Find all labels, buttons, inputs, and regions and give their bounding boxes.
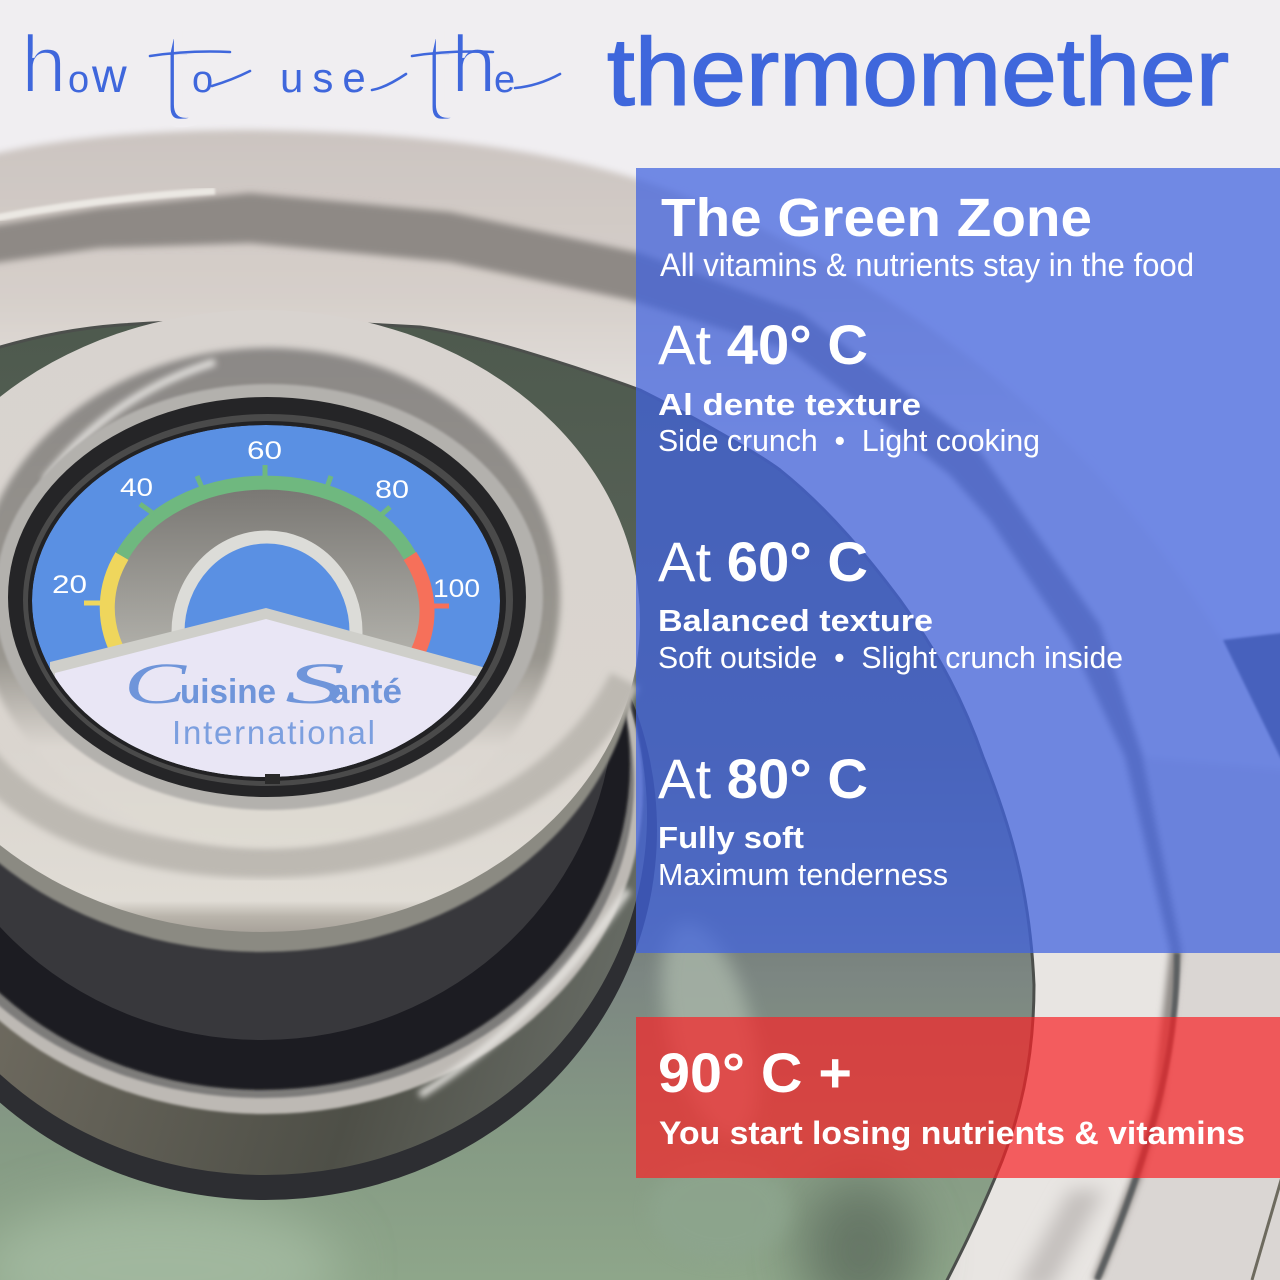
danger background — [636, 1017, 1280, 1178]
dial number 100: 100 — [433, 575, 480, 603]
base highlight — [420, 890, 628, 1095]
rim lower right reflection — [1015, 1190, 1105, 1280]
lid right flange — [1102, 757, 1280, 1280]
heading: at 80 C: At 80° C — [658, 747, 868, 810]
knob body — [0, 310, 640, 932]
text: green zone subtitle: All vitamins & nutrients stay in the food — [660, 247, 1194, 283]
rim highlight — [0, 191, 215, 218]
thermometer dial — [32, 425, 500, 790]
text: fully soft label: Fully soft — [658, 820, 804, 855]
gauge inner fill — [114, 490, 420, 648]
outer edge line bottom right — [1252, 1170, 1280, 1280]
logo: Cuisine Santé: anté — [330, 673, 402, 711]
dial number 80: 80 — [375, 476, 409, 504]
panel: danger zone — [636, 1017, 1280, 1178]
text: al dente label: Al dente texture — [658, 387, 921, 422]
knob lower gray band — [0, 680, 625, 862]
glass reflection: light streak — [643, 913, 777, 1147]
text: balanced detail: Soft outside • Slight crunch inside — [658, 640, 1123, 675]
title script part: w — [91, 50, 140, 103]
logo: Cuisine Santé: uisine — [180, 673, 276, 711]
heading: at 60 C: At 60° C — [658, 530, 868, 593]
green ticks — [140, 465, 390, 516]
knob base: steel collar — [0, 455, 647, 1175]
logo: Cuisine Santé: S — [285, 651, 345, 716]
knob metal ring — [0, 348, 560, 848]
gauge yellow arc — [107, 556, 122, 652]
knob underside — [0, 360, 614, 1040]
dial number 40: 40 — [120, 474, 153, 502]
gauge green arc — [122, 483, 410, 556]
tick yellow — [84, 600, 100, 606]
text: balanced label: Balanced texture — [658, 603, 933, 638]
text: fully soft detail: Maximum tenderness — [658, 857, 948, 892]
handle shadow at right — [1223, 632, 1280, 770]
bezel inner black — [28, 421, 506, 781]
knob base: shiny band — [0, 466, 643, 1114]
glass reflection: dark corner — [800, 1180, 920, 1280]
groove thin line — [1097, 953, 1177, 1280]
heading: The Green Zone: The Green Zone — [661, 188, 1092, 248]
gauge red arc — [410, 556, 427, 652]
title script part: o — [68, 59, 89, 101]
dial number 20: 20 — [52, 571, 87, 599]
title script part: o — [192, 59, 224, 101]
title bold part: thermomether — [607, 19, 1229, 126]
tick red — [434, 604, 449, 608]
glass pane — [0, 321, 1034, 1280]
glass reflection: green patch — [650, 1160, 790, 1260]
knob base: shiny band lower shade — [0, 466, 634, 1098]
maker plate — [55, 619, 478, 790]
maker plate gray border — [50, 608, 486, 790]
knob neck: dark recess — [0, 440, 630, 1090]
dial number 60: 60 — [247, 437, 282, 465]
title script part: h — [21, 19, 67, 110]
bezel inner ring — [23, 414, 513, 786]
logo: Cuisine Santé — [129, 664, 401, 704]
title script part: use — [280, 54, 395, 101]
text: danger message: You start losing nutrients & vitamins — [659, 1115, 1245, 1151]
heading: at 40 C: At 40° C — [658, 313, 868, 376]
text: al dente detail: Side crunch • Light cooking — [658, 423, 1040, 458]
panel: the green zone — [636, 168, 1280, 953]
inner white ring — [172, 530, 362, 634]
title script part: e — [494, 59, 515, 101]
title — [21, 0, 1229, 151]
bezel black ring — [8, 397, 526, 797]
logo: Cuisine Santé: C — [124, 651, 188, 716]
knob lower rim — [0, 328, 638, 952]
panel background — [636, 168, 1280, 953]
title script part: t — [418, 0, 456, 151]
dial notch — [265, 774, 280, 784]
heading: 90 C plus: 90° C + — [658, 1041, 852, 1104]
bezel silver ring — [0, 384, 543, 810]
title script part: h — [451, 19, 497, 110]
glass reflection: lower green — [0, 1200, 340, 1280]
script flourishes — [150, 52, 560, 90]
knob base: rubber gasket — [0, 460, 657, 1200]
logo: International: International — [172, 714, 375, 751]
dial face blue — [32, 425, 500, 777]
knob ring highlight — [45, 362, 215, 480]
rim groove — [0, 193, 1182, 1280]
title script part: t — [156, 0, 194, 151]
